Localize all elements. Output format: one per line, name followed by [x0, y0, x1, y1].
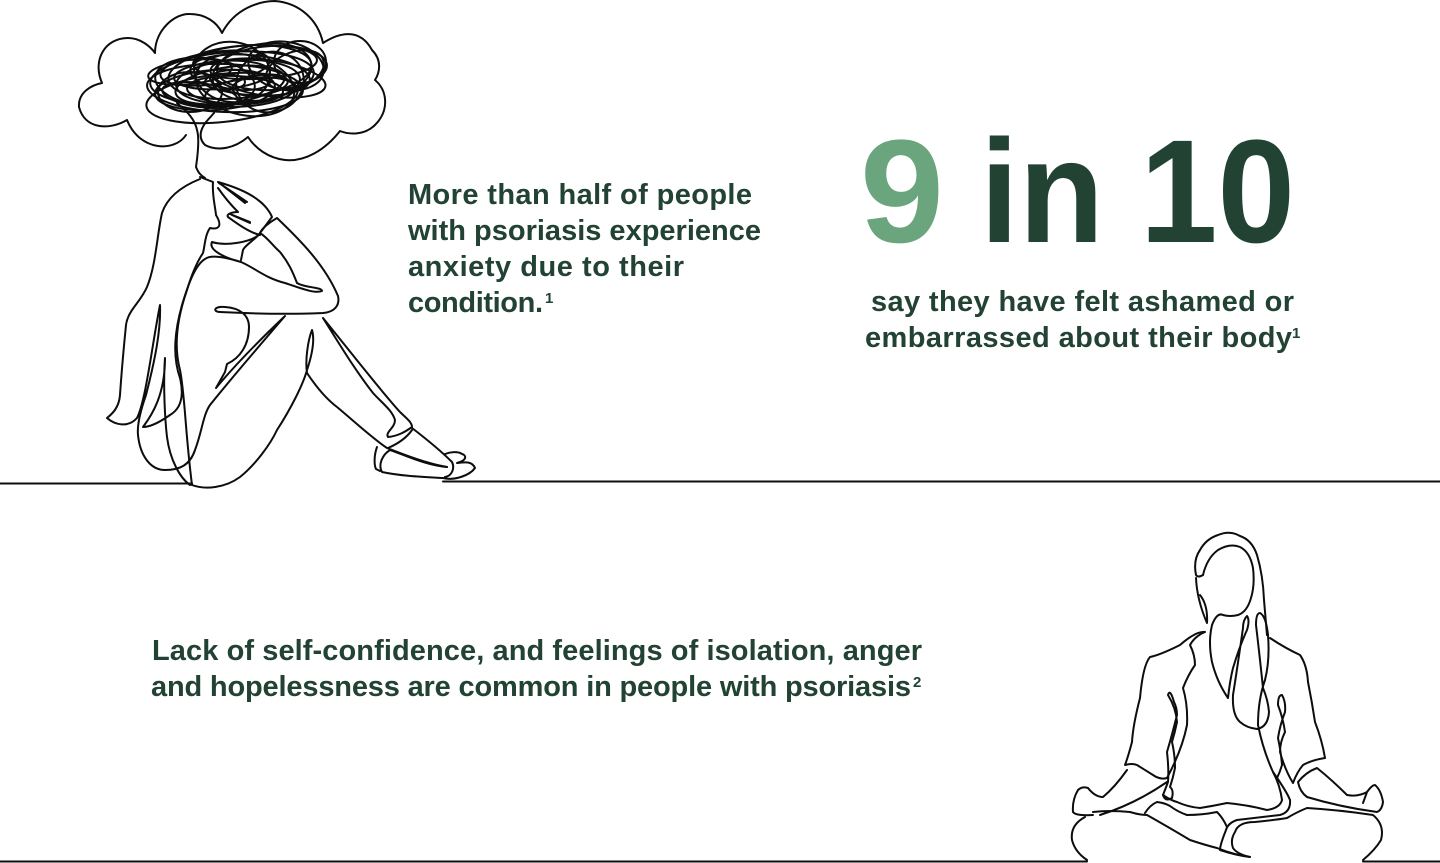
- text: anxiety statistic: 1: [545, 290, 553, 307]
- face, hair strands and torso: [1203, 546, 1382, 860]
- text: anxiety statistic: More than half of people: [408, 179, 752, 211]
- right hand: [1298, 768, 1383, 812]
- text: anxiety statistic: condition.: [408, 287, 543, 319]
- outer hair: [1195, 533, 1267, 635]
- big number: 9 in 10: 9: [860, 110, 944, 274]
- trouser leg: [323, 318, 412, 448]
- text: shame statistic: embarrassed about their body: [865, 322, 1292, 354]
- right sleeve: [1270, 638, 1325, 783]
- text: anxiety statistic: anxiety due to their: [408, 251, 684, 283]
- text: common feelings: and hopelessness are common in people with psoriasis: [151, 671, 911, 703]
- illustration: seated woman: [107, 177, 475, 488]
- ground line: bottom: [0, 860, 1440, 862]
- text: anxiety statistic: with psoriasis experience: [407, 215, 761, 247]
- illustration: thought cloud with tangled scribble: [79, 1, 385, 178]
- foot: [375, 428, 475, 479]
- sleeve and inner hair: [143, 234, 260, 485]
- strand from scribble to head: [177, 103, 205, 178]
- text: anxiety statistic: [407, 179, 761, 319]
- cloud outline: [79, 1, 385, 160]
- text: common feelings: 2: [913, 674, 921, 691]
- neck and spine: [177, 177, 219, 485]
- text: common feelings: [151, 635, 922, 703]
- big number: 9 in 10: [860, 110, 1295, 274]
- left hand and knee: [1072, 770, 1282, 860]
- arm: [241, 233, 322, 292]
- illustration: meditating woman: [1072, 533, 1383, 860]
- text: common feelings: Lack of self-confidence, and feelings of isolation, anger: [152, 635, 922, 667]
- hand: [218, 182, 272, 235]
- left inner fold: [1163, 693, 1177, 799]
- text: shame statistic: [865, 286, 1300, 354]
- hair and back: [107, 179, 338, 470]
- ground line: top: [0, 482, 1440, 484]
- big number: 9 in 10: in: [980, 110, 1104, 274]
- text: shame statistic: 1: [1292, 325, 1300, 342]
- text: shame statistic: say they have felt ashamed or: [871, 286, 1294, 318]
- big number: 9 in 10: 10: [1140, 110, 1295, 274]
- left sleeve: [1125, 632, 1205, 779]
- thigh and lower leg: [192, 330, 447, 488]
- scribble: [144, 36, 329, 130]
